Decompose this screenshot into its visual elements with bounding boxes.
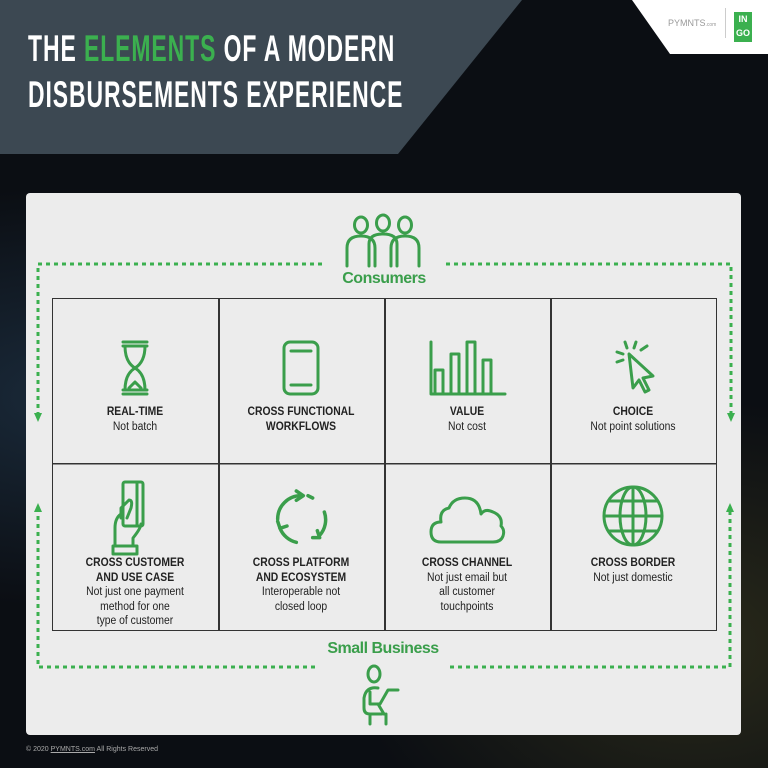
cell: cross customer — [86, 480, 184, 627]
cell: cross functional — [248, 340, 354, 432]
cell: cross platform: Interoperable not — [262, 586, 340, 598]
cell: choice: CHOICE — [613, 406, 653, 418]
cell: cross channel — [422, 496, 512, 612]
cell: cross border: CROSS BORDER — [591, 557, 675, 569]
cell: cross platform — [253, 489, 349, 612]
cell: cross customer: CROSS CUSTOMER — [86, 557, 184, 569]
cell: cross border — [591, 486, 675, 584]
cell: cross functional: WORKFLOWS — [266, 420, 336, 432]
cell: cross platform: AND ECOSYSTEM — [256, 572, 346, 584]
grid — [52, 298, 717, 631]
title: THE ELEMENTS OF A MODERN — [28, 28, 395, 69]
cell: cross channel: all customer — [439, 586, 495, 598]
icon: small business person — [362, 664, 400, 726]
logo box: PYMNTS.com — [668, 18, 716, 28]
cell: value: Not cost — [448, 420, 486, 432]
cell: cross border: Not just domestic — [593, 572, 673, 584]
cell: cross customer: method for one — [100, 600, 170, 612]
cell: cross channel: CROSS CHANNEL — [422, 557, 512, 569]
cell: real-time — [107, 340, 163, 432]
footer: © 2020 PYMNTS.com All Rights Reserved — [26, 746, 158, 753]
cell: cross customer: Not just one payment — [86, 586, 184, 598]
title: DISBURSEMENTS EXPERIENCE — [28, 74, 403, 115]
header panel — [0, 0, 522, 154]
cell: value: VALUE — [450, 406, 484, 418]
cell: real-time: REAL-TIME — [107, 406, 163, 418]
logo box: GO — [736, 28, 750, 38]
cell: choice: Not point solutions — [590, 420, 676, 432]
cell: cross platform: CROSS PLATFORM — [253, 557, 349, 569]
cell: value — [430, 340, 506, 432]
logo box — [632, 0, 768, 54]
icon: consumers — [346, 214, 420, 268]
cell: choice — [590, 340, 676, 432]
title — [28, 28, 403, 115]
main panel — [26, 193, 741, 735]
label: Consumers: Consumers — [342, 270, 426, 287]
cell: cross channel: touchpoints — [441, 600, 493, 612]
cell: cross functional: CROSS FUNCTIONAL — [248, 406, 354, 418]
label: small business: Small Business — [327, 640, 439, 657]
logo box: IN — [738, 14, 748, 24]
cell: cross customer: type of customer — [97, 615, 173, 627]
cell: cross platform: closed loop — [275, 600, 327, 612]
cell: cross channel: Not just email but — [427, 572, 507, 584]
cell: real-time: Not batch — [113, 420, 157, 432]
cell: cross customer: AND USE CASE — [96, 572, 174, 584]
